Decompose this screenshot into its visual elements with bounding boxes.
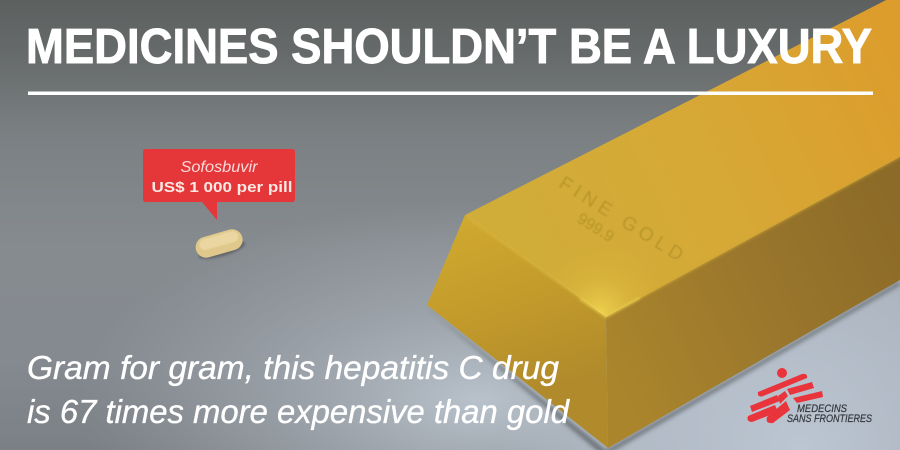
statement text: is 67 times more expensive than gold [27, 393, 571, 430]
gold bar [425, 0, 900, 450]
engraving: fine gold: 999.9 [574, 210, 617, 246]
bar side face [606, 157, 900, 448]
bar shadow [425, 281, 900, 450]
callout: US$ 1 000 per pill [152, 179, 292, 196]
bar highlights [467, 157, 900, 317]
bar top face [465, 0, 900, 317]
pill [193, 227, 247, 262]
callout [143, 149, 295, 220]
MSF logo [748, 368, 873, 425]
pill with callout [143, 149, 295, 262]
statement text [27, 349, 571, 430]
bar end face [427, 215, 608, 448]
title rule [28, 92, 873, 95]
callout: Sofosbuvir [180, 159, 258, 176]
logo wordmark: MEDECINS [797, 403, 848, 415]
logo wordmark [787, 403, 873, 425]
engraving: fine gold: FINE GOLD [555, 173, 687, 266]
logo wordmark: SANS FRONTIERES [787, 413, 873, 425]
statement text: Gram for gram, this hepatitis C drug [27, 349, 560, 386]
logo icon: running figure [748, 368, 823, 423]
